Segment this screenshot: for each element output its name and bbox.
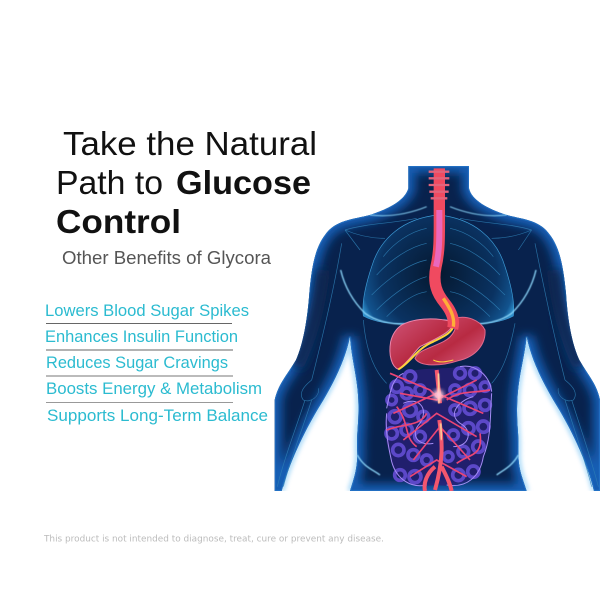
- benefit 1: Lowers Blood Sugar Spikes: [45, 301, 249, 320]
- title: Path to: [56, 164, 163, 201]
- ribs and bones: [277, 218, 598, 487]
- armpit halo: [282, 337, 594, 491]
- body rim light: [275, 166, 600, 491]
- benefit 4: Boosts Energy & Metabolism: [46, 379, 262, 398]
- subheading: Other Benefits of Glycora: [62, 248, 272, 268]
- benefits list: [45, 301, 268, 425]
- esophagus: [429, 168, 454, 328]
- benefit 2: Enhances Insulin Function: [45, 327, 238, 346]
- disclaimer: This product is not intended to diagnose, treat, cure or prevent any disease.: [43, 534, 384, 544]
- benefit 5: Supports Long-Term Balance: [47, 406, 268, 425]
- title: Control: [56, 203, 181, 240]
- benefit 3: Reduces Sugar Cravings: [46, 353, 228, 372]
- title: Take the Natural: [63, 125, 317, 162]
- body silhouette: [275, 166, 600, 491]
- bright muscle and diaphragm lines: [341, 207, 536, 475]
- intestines: [385, 366, 492, 491]
- anatomy illustration: [275, 166, 600, 491]
- stomach and liver: [390, 317, 485, 369]
- lungs: [363, 215, 514, 323]
- title: [56, 125, 317, 240]
- title: Glucose: [176, 164, 311, 201]
